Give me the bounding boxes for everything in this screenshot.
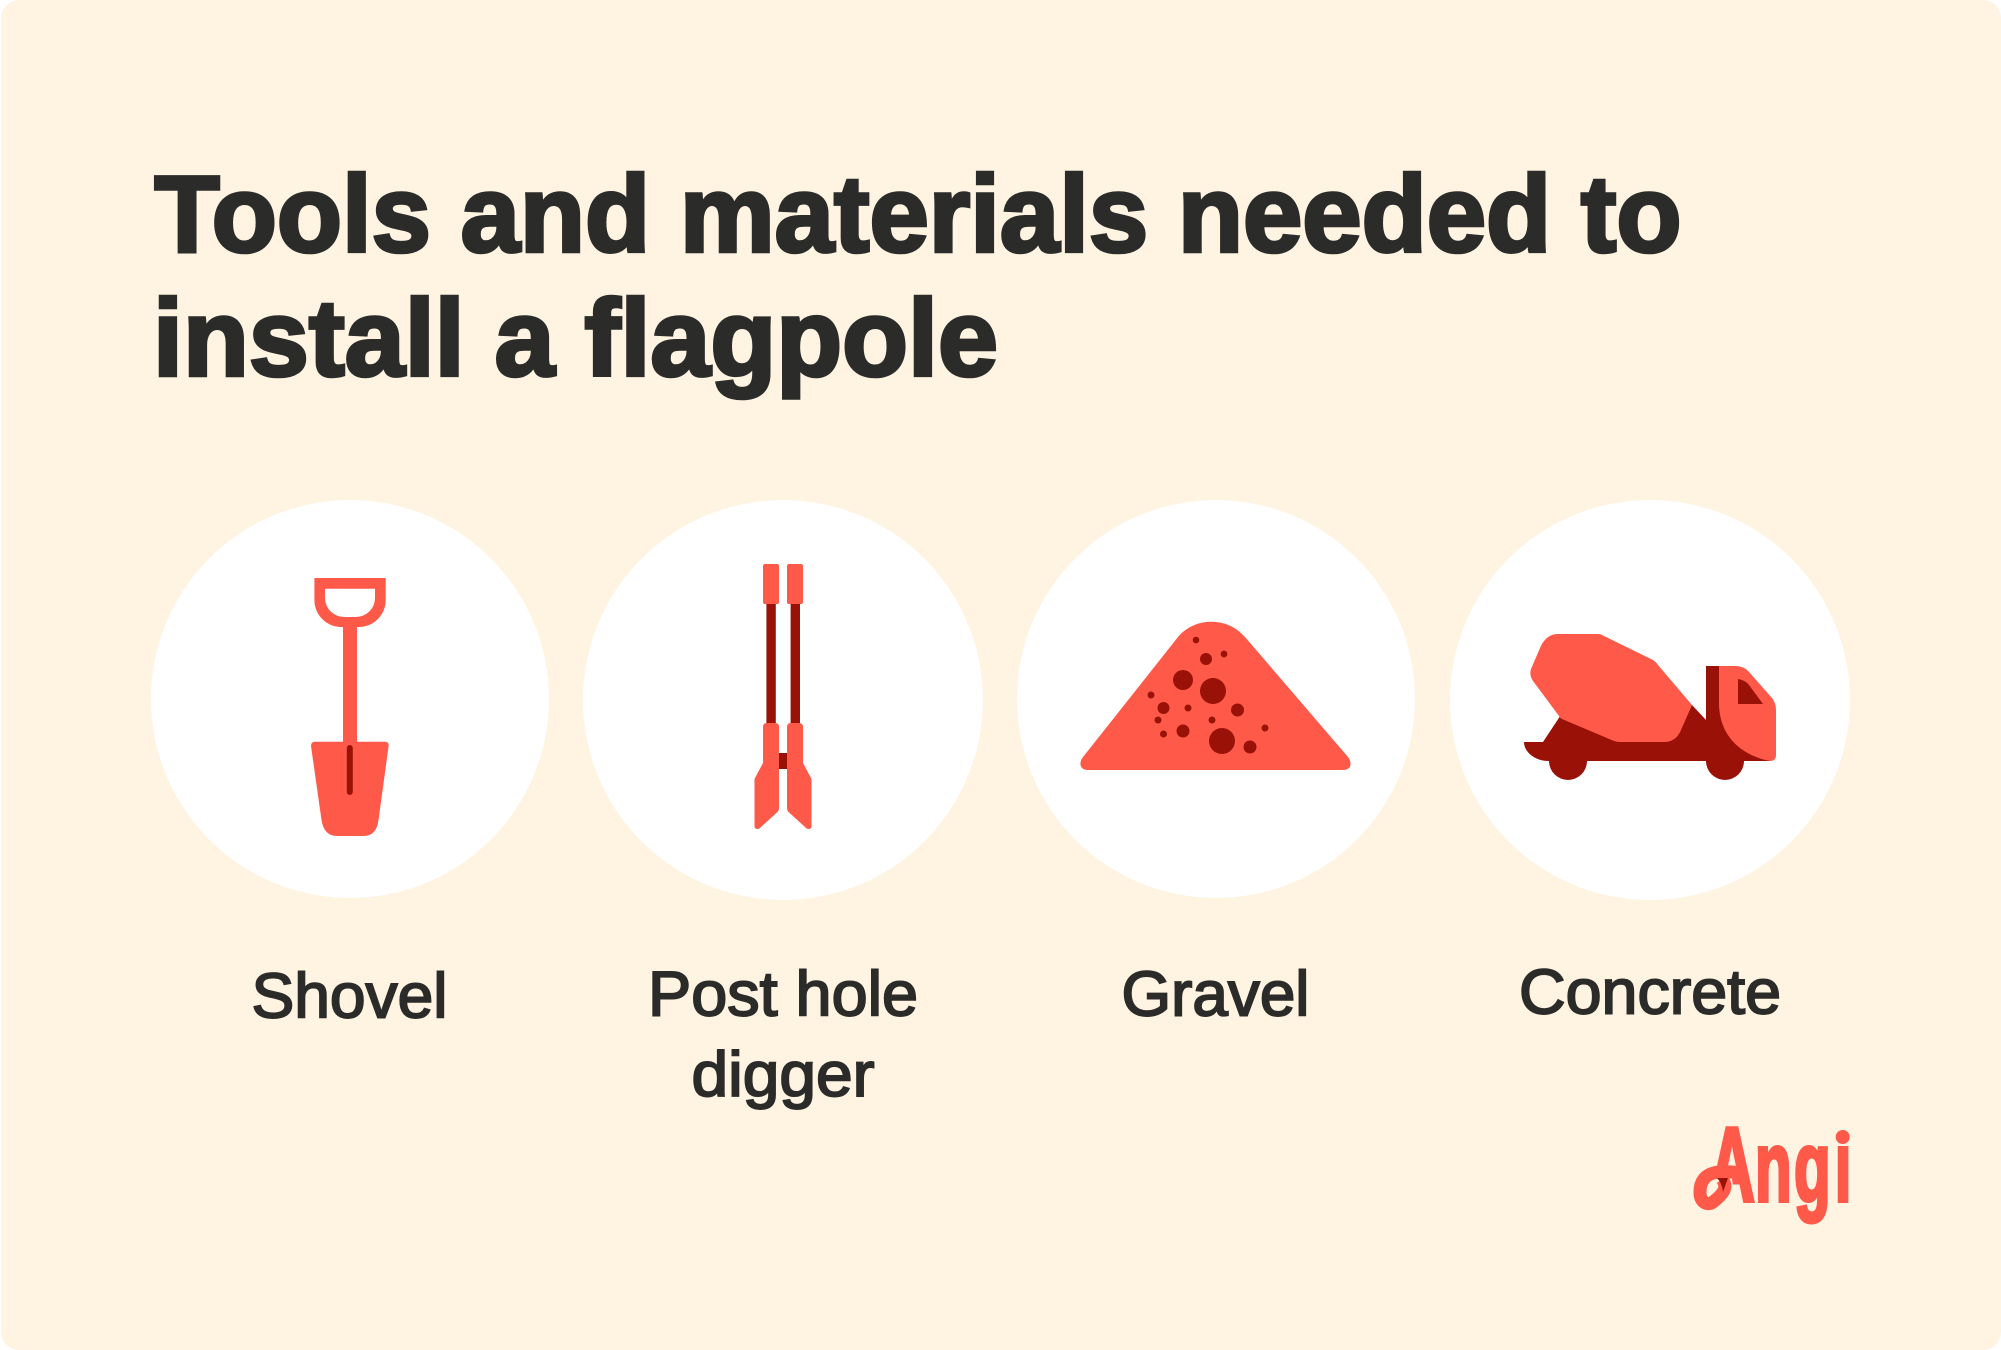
logo: Angi [1694, 1126, 1850, 1224]
title: Tools and materials needed to [154, 154, 1682, 276]
panel: post hole digger [583, 500, 983, 1110]
title: install a flagpole [153, 278, 998, 400]
gravel circle [1017, 500, 1415, 898]
label: Post hole digger [648, 960, 918, 1110]
title [153, 154, 1682, 400]
panel: concrete [1450, 500, 1850, 1027]
logo: Angi: A [1709, 1105, 1755, 1224]
logo: Angi: ngi [1755, 1111, 1851, 1223]
icon: shovel [311, 578, 389, 836]
panel: shovel [151, 500, 549, 1032]
label: Shovel: Shovel [252, 962, 448, 1032]
label: Post hole digger: digger [692, 1040, 874, 1110]
icon: gravel pile [1080, 622, 1351, 770]
icon: post hole digger [754, 564, 812, 829]
shovel circle [151, 500, 549, 898]
label: Post hole digger: Post hole [648, 960, 918, 1030]
label: Concrete: Concrete [1519, 957, 1781, 1027]
concrete circle [1450, 500, 1850, 900]
panel: gravel [1017, 500, 1415, 1030]
icon: cement mixer truck [1524, 634, 1776, 780]
label: Gravel: Gravel [1122, 960, 1310, 1030]
digger circle [583, 500, 983, 900]
